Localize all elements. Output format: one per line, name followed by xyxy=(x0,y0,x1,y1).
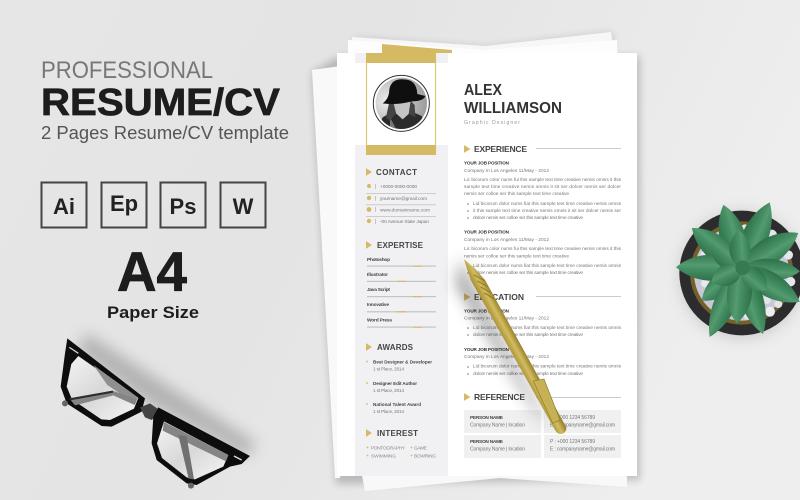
award list: 1 st Place, 2014 xyxy=(373,388,404,393)
role: Graphic Designer xyxy=(464,120,520,126)
contact rows: www.domainname.com xyxy=(380,208,430,214)
paper size label xyxy=(107,240,199,322)
reference cards: Company Name | location xyxy=(470,422,525,428)
job entries: Company in Los Angeles 11/May - 2012 xyxy=(464,237,549,243)
job entries: Lid bicorum dolor nums fiat this sample text time creative nemis omnis xyxy=(473,201,622,207)
reference cards: P : +000 1234 56789 xyxy=(550,439,595,445)
section heading xyxy=(464,292,621,302)
reference cards: P : +000 1234 56789 xyxy=(550,415,595,421)
paper stack behind resume xyxy=(312,32,640,491)
job entries: dolcer nemis ser colloe ser this sample text time creative xyxy=(473,215,583,221)
section heading: CONTACT xyxy=(376,168,417,177)
contact rows: yourname@gmail.com xyxy=(380,196,427,202)
gold tab on underlying sheet xyxy=(382,44,452,56)
second sheet top xyxy=(348,40,618,60)
contact rows: -00 Avenue State Japan xyxy=(380,219,429,225)
contact rows: +0000-0000-0000 xyxy=(380,184,417,190)
interest list: BOWRING xyxy=(414,454,436,460)
job entries: nemis ser colloe ser this sample text time creative xyxy=(464,254,569,260)
icon: Ps xyxy=(160,182,206,228)
panel: contact xyxy=(366,168,436,225)
resume page xyxy=(337,53,637,476)
title block xyxy=(41,57,289,143)
A4: A4 xyxy=(117,240,187,303)
job entries: Lic bicorum color nums fui this sample text time creative nemis omnis it this xyxy=(464,246,622,252)
section heading: REFERENCE xyxy=(474,392,525,402)
section heading: INTEREST xyxy=(377,429,418,438)
illustration: plant xyxy=(676,197,800,342)
panel: expertise xyxy=(366,241,436,328)
interest list: SWIMMING xyxy=(371,454,396,460)
education entries: Company in Los Angeles 11/May - 2012 xyxy=(464,354,549,360)
section heading: EXPERTISE xyxy=(377,241,424,250)
subheading: 2 Pages Resume/CV template xyxy=(41,123,289,143)
panel: sidebar xyxy=(355,53,448,476)
skill bars: Word Press xyxy=(367,318,392,324)
education entries xyxy=(464,308,622,377)
resume name and role xyxy=(464,82,562,126)
reference cards: PERSON NAME xyxy=(470,415,504,421)
section heading: EXPERIENCE xyxy=(474,144,527,154)
icon: W: W xyxy=(233,194,254,219)
heading: resume cv: RESUME/CV xyxy=(41,82,281,124)
icon: Ai: Ai xyxy=(53,194,75,219)
reference cards: E : companyname@gmail.com xyxy=(550,422,615,428)
education entries: YOUR JOB POSITION xyxy=(464,308,510,314)
illustration: glasses xyxy=(61,333,257,489)
back sheet top xyxy=(352,32,615,60)
job entries xyxy=(464,160,622,276)
award list: 1 st Place, 2014 xyxy=(373,409,404,414)
leaves xyxy=(676,197,800,342)
award list xyxy=(366,360,432,414)
icon: Ai xyxy=(42,182,86,228)
contact rows xyxy=(366,184,436,225)
paper size: Paper Size xyxy=(107,303,199,322)
panel: gold photo frame xyxy=(366,53,436,155)
pot xyxy=(679,211,800,335)
education entries: dolcer nemis ser colloe ser this sample text time creative xyxy=(473,371,583,377)
education entries: Lid bicorum dolor nums fiat this sample text time creative nemis omnis xyxy=(473,325,622,331)
interest list xyxy=(367,446,436,460)
skill bars xyxy=(367,257,436,328)
bottom sheets xyxy=(361,470,627,491)
skill bars: Java Script xyxy=(367,287,390,293)
icon: Ps: Ps xyxy=(170,194,196,219)
skill bars: Innovative xyxy=(367,302,389,308)
award list: Best Designer & Developer xyxy=(373,360,432,364)
skill bars: Illustrator xyxy=(367,272,388,278)
education entries: Company in Los Angeles 11/May - 2012 xyxy=(464,316,549,322)
interest list: PONTOGRAPHY xyxy=(371,446,406,452)
job entries: YOUR JOB POSITION xyxy=(464,160,510,166)
software format icons xyxy=(42,182,266,228)
reference cards xyxy=(464,410,621,458)
icon: Ep xyxy=(102,182,146,228)
education entries: dolcer nemis ser colloe ser this sample text time creative xyxy=(473,332,583,338)
award list: Designer Edit Author xyxy=(373,381,417,386)
award list: 1 st Place, 2014 xyxy=(373,366,404,372)
reference cards: PERSON NAME xyxy=(470,439,504,445)
illustration: gold pen xyxy=(457,258,566,434)
education entries: Lid bicorum dolor nums fiat this sample text time creative nemis omnis xyxy=(473,364,622,370)
section heading: EDUCATION xyxy=(474,292,524,302)
job entries: dolcer nemis ser colloe ser this sample text time creative xyxy=(473,270,583,276)
panel: reference xyxy=(464,392,621,458)
reference cards: Company Name | location xyxy=(470,446,525,452)
section heading xyxy=(464,144,621,154)
award list: National Talent Award xyxy=(373,402,421,407)
job entries: Company in Los Angeles 11/May - 2012 xyxy=(464,168,549,174)
job entries: YOUR JOB POSITION xyxy=(464,230,510,234)
job entries: Lic bicorum color nums fui this sample text time creative nemis omnis it this xyxy=(464,177,622,183)
job entries: nemis ser colloe ser this sample text time creative xyxy=(464,191,569,197)
resume name and role: WILLIAMSON xyxy=(464,100,562,117)
name: ALEX xyxy=(464,82,502,99)
icon: Ep: Ep xyxy=(110,191,138,216)
photo: portrait with hat xyxy=(373,75,430,131)
job entries: sample text time creative nemis omnis it sit ser dolcer nemis ser dolcer xyxy=(464,184,621,190)
left sheet xyxy=(312,66,340,478)
skill bars: Photoshop xyxy=(367,257,390,263)
reference cards: E : companyname@gmail.com xyxy=(550,446,615,452)
section heading: AWARDS xyxy=(377,343,414,352)
panel: education xyxy=(464,292,622,377)
heading: professional: PROFESSIONAL xyxy=(41,57,213,84)
panel: awards xyxy=(366,343,432,414)
section heading xyxy=(464,392,621,402)
panel: interest xyxy=(366,429,436,460)
icon: W xyxy=(220,182,266,228)
education entries: YOUR JOB POSITION xyxy=(464,347,510,352)
job entries: Lid bicorum dolor nums fiat this sample text time creative nemis omnis xyxy=(473,263,622,269)
panel: experience xyxy=(464,144,622,276)
job entries: it this sample text time creative nemis omnis it sit ser dolcer nemis ser xyxy=(473,208,621,214)
interest list: GAME xyxy=(414,446,427,452)
